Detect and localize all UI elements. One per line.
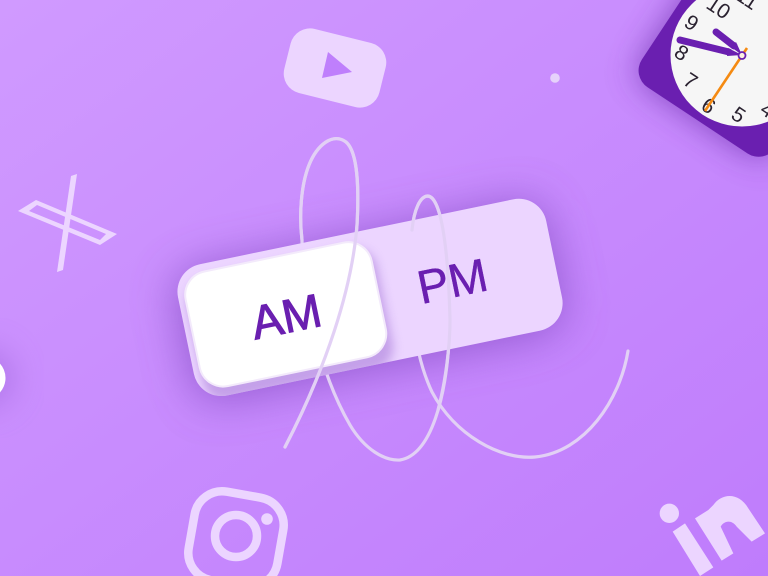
hour hand [716, 32, 734, 46]
dot [550, 73, 560, 83]
toggle track [172, 194, 568, 401]
clock numbers: 5 [727, 102, 749, 128]
curve in front of toggle [285, 139, 450, 447]
toggle: AM/PM switch [178, 198, 563, 396]
icon: X [18, 174, 117, 272]
clock numbers: 6 [697, 93, 719, 119]
clock shadow [631, 0, 768, 164]
clock face [670, 0, 768, 126]
clock [631, 0, 768, 164]
white circle at left edge [0, 348, 14, 408]
minute hand [680, 40, 729, 52]
icon: Instagram [184, 487, 288, 576]
clock numbers: 8 [670, 40, 692, 66]
toggle shade under knob [182, 244, 398, 406]
second hand [705, 48, 747, 111]
icon: YouTube [279, 24, 391, 112]
icon: LinkedIn [660, 496, 765, 576]
pivot [738, 52, 746, 59]
curve behind toggle [285, 139, 628, 460]
toggle shadow [170, 197, 569, 406]
clock body [631, 0, 768, 164]
AM knob [181, 238, 391, 391]
clock numbers [670, 0, 768, 128]
clock numbers: 9 [680, 10, 702, 36]
label: AM: AM [246, 283, 326, 349]
label: PM: PM [413, 248, 492, 314]
clock numbers: 7 [679, 68, 701, 94]
